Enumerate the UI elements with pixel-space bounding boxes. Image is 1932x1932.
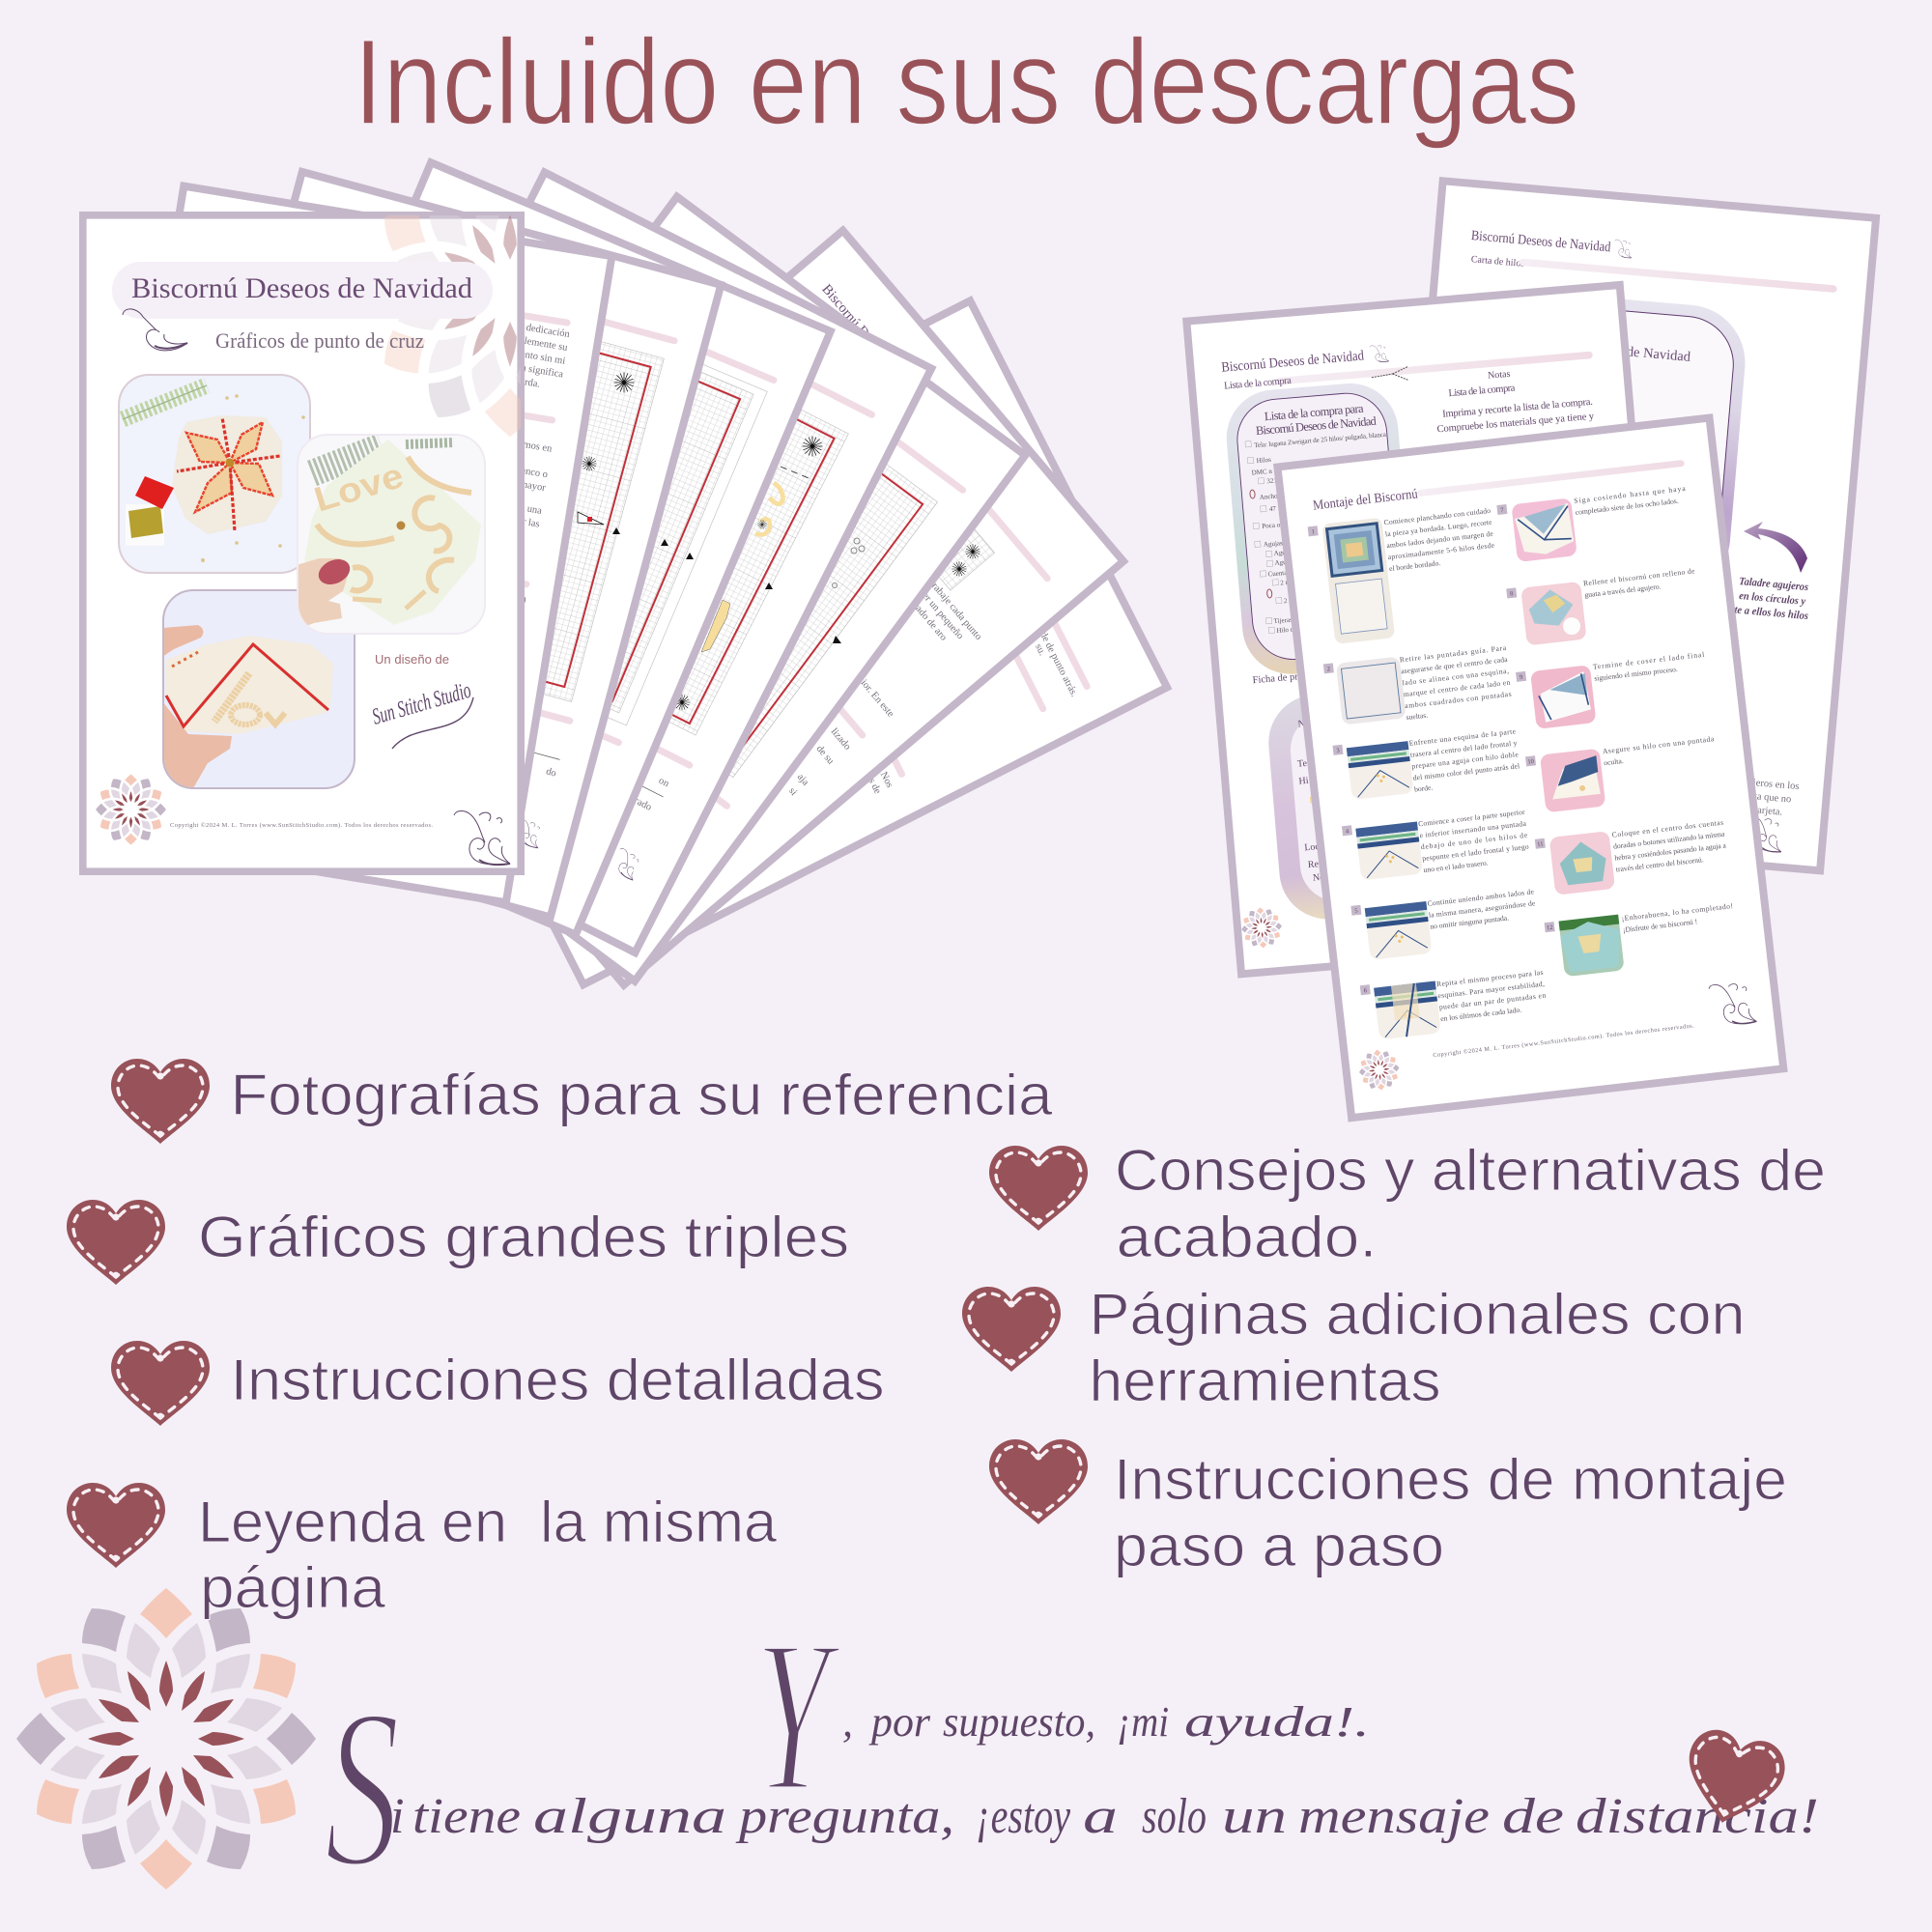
- step 1 text: la pieza ya bordada. Luego, recorte: [1384, 518, 1492, 538]
- page 2: imos en: [520, 439, 554, 455]
- arrow note: [1729, 576, 1809, 622]
- shopping list card: Hilos: [1256, 456, 1271, 465]
- step 11 text: Coloque en el centro dos cuentas: [1611, 818, 1724, 839]
- page 2: r las: [522, 517, 540, 530]
- feature 7: paso a paso: [1114, 1514, 1444, 1578]
- step 12 text: ¡Disfrute de su biscornú !: [1622, 917, 1698, 934]
- feature 4: página: [200, 1555, 386, 1620]
- script line 1: supuesto,: [943, 1698, 1095, 1746]
- script line 2: pregunta,: [735, 1789, 954, 1844]
- page: thread chart: [1387, 181, 1876, 870]
- cover small mandala: [96, 774, 166, 845]
- feature 5: [1115, 1138, 1826, 1269]
- script line 2: a: [1083, 1789, 1118, 1844]
- scissors: [1371, 367, 1408, 384]
- step 5 text: no omitir ninguna puntada.: [1430, 913, 1510, 931]
- step 3 text: borde.: [1414, 782, 1434, 794]
- script line 1: ¡mi: [1117, 1698, 1169, 1746]
- shopping list card: Hilo de: [1276, 625, 1297, 635]
- shopping list card: Agu: [1273, 549, 1287, 557]
- designer credit: Sun Stitch Studio: [369, 678, 474, 730]
- cover subtitle: Gráficos de punto de cruz: [215, 328, 424, 353]
- page 2: mento sin mi: [512, 348, 566, 367]
- step 2 text: Retire las puntadas guía. Para: [1399, 643, 1507, 664]
- page: assembly instructions: 12: [1547, 924, 1553, 932]
- feature 4: [198, 1490, 778, 1620]
- step 2 text: marque el centro de cada lado en: [1403, 678, 1511, 698]
- feature list: left: [67, 1059, 1053, 1620]
- script line 1: Y: [755, 1596, 841, 1837]
- heart icon 3: [111, 1341, 210, 1426]
- page 3: do: [545, 766, 557, 780]
- cover faded mandala: [384, 215, 521, 437]
- step 2 text: [1399, 643, 1514, 722]
- page: assembly instructions: 2: [1326, 666, 1330, 673]
- page 2: i una: [521, 503, 543, 517]
- step 9 text: Termine de coser el lado final: [1592, 650, 1705, 671]
- page 7: si: [786, 785, 799, 798]
- heart icon 4: [67, 1483, 165, 1568]
- page 2: rda.: [524, 377, 541, 390]
- step 7 text: Siga cosiendo hasta que haya: [1574, 484, 1687, 505]
- feature 5: acabado.: [1117, 1205, 1378, 1269]
- designer credit: [369, 652, 474, 749]
- feature 6: herramientas: [1090, 1349, 1441, 1413]
- icon: title flourish: [123, 309, 187, 351]
- step 3 text: trasera al centro del lado frontal y: [1410, 738, 1518, 759]
- script line 2: de: [1502, 1789, 1564, 1844]
- shopping list card: Agujas: [1264, 539, 1283, 549]
- page 5: on: [657, 776, 671, 790]
- arrow: [1744, 522, 1807, 573]
- arrow note: en los círculos y: [1739, 590, 1806, 608]
- assembly heading: Montaje del Biscornú: [1312, 487, 1418, 514]
- shopping list card: Lista de la compra para: [1264, 402, 1365, 423]
- step 4 text: debajo de uno de los hilos de: [1420, 831, 1528, 851]
- feature 4: Leyenda en la misma: [198, 1490, 778, 1554]
- step 5 text: Continúe uniendo ambos lados de: [1427, 887, 1535, 908]
- page 2: mayor: [519, 479, 547, 494]
- page: assembly instructions: 4: [1346, 828, 1350, 835]
- page 7: Biscornú Deseos de Navidad: [818, 282, 936, 415]
- page 2: blemente su: [519, 335, 569, 354]
- icon: assembly flourish: [1709, 980, 1756, 1027]
- script line 2: mensaje: [1298, 1789, 1490, 1844]
- feature 7: [1114, 1447, 1787, 1578]
- step 7 photo: [1511, 497, 1577, 562]
- shopping list card: Anchor: [1260, 492, 1281, 501]
- page 8: back page: su.: [1033, 642, 1047, 658]
- project card: Hi: [1298, 776, 1309, 787]
- page: shopping list: Notas: [1488, 369, 1511, 382]
- step 2 text: sueltas.: [1406, 711, 1429, 722]
- shopping list card: [1223, 380, 1418, 678]
- script line 2: distancia!: [1576, 1789, 1819, 1844]
- page: shopping list: [1186, 285, 1674, 974]
- cover title pill: Biscornú Deseos de Navidad: [131, 272, 472, 304]
- step 11 text: doradas o botones utilizando la misma: [1613, 830, 1725, 851]
- page 7: hacer un pequeño: [911, 581, 965, 641]
- step 10 text: oculta.: [1604, 756, 1624, 767]
- script line 1: ,: [842, 1698, 853, 1746]
- script line 2: ¡estoy: [976, 1789, 1071, 1844]
- step 9 text: [1592, 650, 1706, 683]
- assembly sheet: [1277, 418, 1783, 1118]
- heart icon 8: [1675, 1724, 1791, 1834]
- step 11 text: [1611, 818, 1728, 874]
- page 1: cover: [79, 212, 525, 875]
- feature 5: Consejos y alternativas de: [1115, 1138, 1826, 1203]
- step 1 photo: [1321, 518, 1395, 644]
- project card: Reg: [1307, 859, 1323, 870]
- step 6 text: en los últimos de cada lado.: [1440, 1006, 1522, 1023]
- page 7: aja: [795, 772, 810, 788]
- page 2: [176, 182, 615, 902]
- heart icon 5: [989, 1146, 1088, 1231]
- fan of chart pages: [78, 145, 1167, 985]
- heart icon 6: [962, 1287, 1061, 1372]
- page: assembly instructions: 11: [1537, 840, 1544, 848]
- project card: [1264, 685, 1449, 923]
- script line 2: alguna: [533, 1789, 726, 1844]
- shopping list card: Agu: [1274, 558, 1287, 567]
- feature 2: Gráficos grandes triples: [198, 1205, 849, 1269]
- page: thread chart: uenta que no: [1739, 790, 1792, 805]
- script line 2: S: [325, 1662, 400, 1915]
- feature list: right: [962, 1138, 1826, 1578]
- shopping list card: 2 b: [1284, 596, 1293, 605]
- page 6: [287, 197, 1025, 981]
- page: shopping list: Lista de la compra: [1448, 383, 1516, 399]
- page 8: back page: el borde de punto atrás.: [1027, 610, 1079, 698]
- page: shopping list: Biscornú Deseos de Navidad: [1221, 348, 1365, 376]
- page: thread chart: s de Navidad: [1617, 343, 1691, 365]
- page: thread chart: tarjeta.: [1754, 805, 1783, 818]
- step 4 text: [1418, 808, 1531, 874]
- page 4: [176, 162, 831, 935]
- script line 1: por: [868, 1698, 931, 1746]
- page 5: [248, 172, 931, 952]
- step 1 text: [1383, 506, 1496, 573]
- step 4 text: Comience a coser la parte superior: [1418, 808, 1525, 828]
- heart icon 7: [989, 1439, 1088, 1524]
- cover title pill: [112, 262, 493, 319]
- page 8: back page: d Nos: [874, 763, 895, 789]
- step 2 photo: [1336, 657, 1406, 725]
- assembly mandala: [1357, 1047, 1402, 1093]
- shopping list card: Tijeras a: [1273, 615, 1298, 625]
- shopping list card: 47: [1269, 505, 1277, 513]
- page: assembly instructions: 9: [1520, 674, 1523, 681]
- icon: cover flourish: [454, 811, 510, 865]
- step 6 text: Repita el mismo proceso para las: [1436, 968, 1544, 988]
- step 1 text: el borde bordado.: [1389, 558, 1441, 573]
- page: assembly instructions: [1277, 418, 1783, 1118]
- shopping list card: Tela: lugana Zweigart de 25 hilos/ pulgada, blanca: [1254, 431, 1387, 449]
- shopping list card: Biscornú Deseos de Navidad: [1255, 414, 1378, 438]
- step 2 text: ambos cuadrados con puntadas: [1405, 690, 1512, 710]
- page: shopping list: Compruebe los materials que ya tiene y: [1436, 412, 1595, 435]
- shopping list card: Cuentas: [1267, 569, 1291, 579]
- step 3 photo: [1347, 741, 1414, 800]
- script line 1: ayuda!.: [1184, 1698, 1370, 1746]
- step 11 photo: [1549, 831, 1615, 895]
- feature 6: [1090, 1282, 1745, 1413]
- page 7: lizado: [829, 726, 853, 753]
- cover sheet: [83, 215, 521, 871]
- step 7 text: completado siete de los ocho lados.: [1575, 497, 1679, 517]
- step 12 photo: [1559, 915, 1625, 977]
- title: Incluido en sus descargas: [354, 15, 1579, 150]
- step 8 photo: [1520, 582, 1587, 645]
- page: assembly instructions: 10: [1527, 758, 1534, 766]
- step 4 text: e inferior insertando una puntada: [1419, 819, 1527, 839]
- document group: supplies and assembly pages: [1186, 181, 1876, 1118]
- step 8 text: [1583, 566, 1697, 599]
- page 3: [131, 172, 721, 917]
- step 1 text: ambos lados dejando un margen de: [1386, 529, 1494, 550]
- script line 1: [755, 1596, 1370, 1837]
- page: thread chart: gujeros en los: [1743, 777, 1800, 792]
- assembly copyright: Copyright ©2024 M. L. Torres (www.SunStitchStudio.com). Todos los derechos reservados.: [1433, 1022, 1695, 1059]
- step 3 text: del mismo color del punto atrás del: [1412, 761, 1520, 782]
- page 8: back page: s de: [866, 777, 883, 796]
- step 1 text: aproximadamente 5-6 hilos desde: [1387, 541, 1495, 561]
- step 10 text: Asegure su hilo con una puntada: [1602, 734, 1715, 755]
- arrow note: Taladre agujeros: [1739, 576, 1809, 593]
- photo 1: red star biscornu: [118, 374, 311, 574]
- step 4 text: uno en el lado trasero.: [1423, 858, 1489, 874]
- step 3 text: prepare una aguja con hilo doble: [1411, 750, 1520, 771]
- cover copyright: Copyright ©2024 M. L. Torres (www.SunStitchStudio.com). Todos los derechos reservados.: [170, 822, 433, 829]
- step 4 photo: [1355, 822, 1423, 880]
- step 12 text: ¡Enhorabuena, lo ha completado!: [1621, 901, 1733, 923]
- shopping list card: 321: [1266, 476, 1278, 485]
- feature 3: Instrucciones detalladas: [230, 1348, 885, 1412]
- page 7: ior. En este: [859, 678, 896, 720]
- page: shopping list: Lista de la compra: [1224, 376, 1293, 392]
- page: assembly instructions: 8: [1510, 590, 1514, 598]
- step 6 text: esquinas. Para mayor estabilidad,: [1437, 980, 1545, 1000]
- photo 2: love biscornu: Love: [309, 455, 408, 520]
- step 10 text: [1602, 734, 1717, 767]
- project card: Loc: [1304, 841, 1321, 853]
- shopping list card: DMC n: [1251, 468, 1273, 477]
- project card: Te: [1297, 758, 1308, 770]
- closing script message: [325, 1596, 1819, 1915]
- page: shopping list: Imprima y recorte la lista de la compra.: [1442, 397, 1593, 420]
- photo 3: biscornu held in hand: [162, 589, 355, 788]
- page 2: n: [521, 594, 527, 606]
- page: assembly instructions: 3: [1336, 748, 1340, 754]
- feature 7: Instrucciones de montaje: [1114, 1447, 1787, 1512]
- page 7: [343, 231, 1123, 985]
- page: assembly instructions: 1: [1311, 528, 1315, 535]
- page 2: ón significa: [515, 362, 564, 381]
- step badges: [1308, 504, 1560, 995]
- step 6 text: puede dar un par de puntadas en: [1438, 991, 1547, 1011]
- script line 2: [325, 1662, 1819, 1915]
- script line 2: un: [1222, 1789, 1287, 1844]
- step 12 text: [1621, 901, 1735, 934]
- page: thread chart: Biscornú Deseos de Navidad: [1470, 228, 1612, 255]
- designer credit: Un diseño de: [375, 652, 449, 667]
- step 1 text: Comience planchando con cuidado: [1383, 506, 1492, 526]
- project card: N: [1297, 719, 1305, 729]
- step 6 photo: [1374, 980, 1441, 1039]
- page: thread chart: Carta de hilos: [1470, 254, 1525, 270]
- step 10 photo: [1540, 749, 1605, 812]
- heart icon 2: [67, 1200, 165, 1285]
- feature 6: Páginas adicionales con: [1090, 1282, 1745, 1347]
- step 3 text: [1408, 726, 1522, 794]
- page 2: y dedicación: [518, 322, 571, 340]
- step 5 photo: [1365, 901, 1432, 960]
- step 8 text: Rellene el biscornú con relleno de: [1583, 566, 1695, 587]
- large mandala: [16, 1588, 316, 1889]
- step 2 text: asegurarse de que el centro de cada: [1401, 655, 1509, 675]
- shopping list card: Poca o: [1262, 521, 1281, 530]
- script line 2: solo: [1142, 1789, 1207, 1844]
- script line 2: tiene: [412, 1789, 521, 1844]
- step 9 photo: [1530, 665, 1596, 729]
- step 11 text: través del centro del biscornú.: [1615, 855, 1704, 874]
- page: assembly instructions: 5: [1354, 908, 1358, 915]
- page 7: cuadrado de aro: [898, 586, 949, 643]
- page 5: Dorado: [621, 790, 653, 813]
- feature 1: Fotografías para su referencia: [230, 1063, 1053, 1127]
- page: shopping list: Ficha de proyecto: [1252, 669, 1325, 686]
- step 4 text: pespunte en el lado frontal y luego: [1422, 842, 1529, 863]
- step 5 text: la misma manera, asegurándose de: [1428, 898, 1536, 920]
- script line 2: i: [390, 1789, 404, 1844]
- arrow note: ate a ellos los hilos: [1729, 604, 1809, 622]
- page 7: trabaje cada punto: [927, 579, 983, 642]
- step 11 text: hebra y cosiéndolos pasando la aguja a: [1614, 840, 1727, 863]
- assembly heading: [1312, 457, 1686, 514]
- step 7 text: [1574, 484, 1688, 517]
- step 6 text: [1436, 968, 1548, 1023]
- step 5 text: [1427, 887, 1538, 931]
- heart icon 1: [111, 1059, 210, 1144]
- step 9 text: siguiendo el mismo proceso.: [1594, 665, 1678, 683]
- step 8 text: guata a través del agujero.: [1584, 582, 1662, 599]
- step 3 text: Enfrente una esquina de la parte: [1408, 726, 1517, 748]
- page 7: de su: [814, 744, 837, 767]
- step 2 text: lado se alinea con una esquina,: [1402, 667, 1509, 687]
- shopping list card: 2 m: [1280, 579, 1292, 586]
- photo 2: love biscornu: [297, 434, 486, 635]
- page 2: lanco o: [518, 466, 549, 480]
- page 8: back page: [386, 300, 1167, 984]
- page: assembly instructions: 6: [1363, 987, 1368, 994]
- page: assembly instructions: 7: [1500, 507, 1505, 514]
- project card: No: [1313, 872, 1325, 884]
